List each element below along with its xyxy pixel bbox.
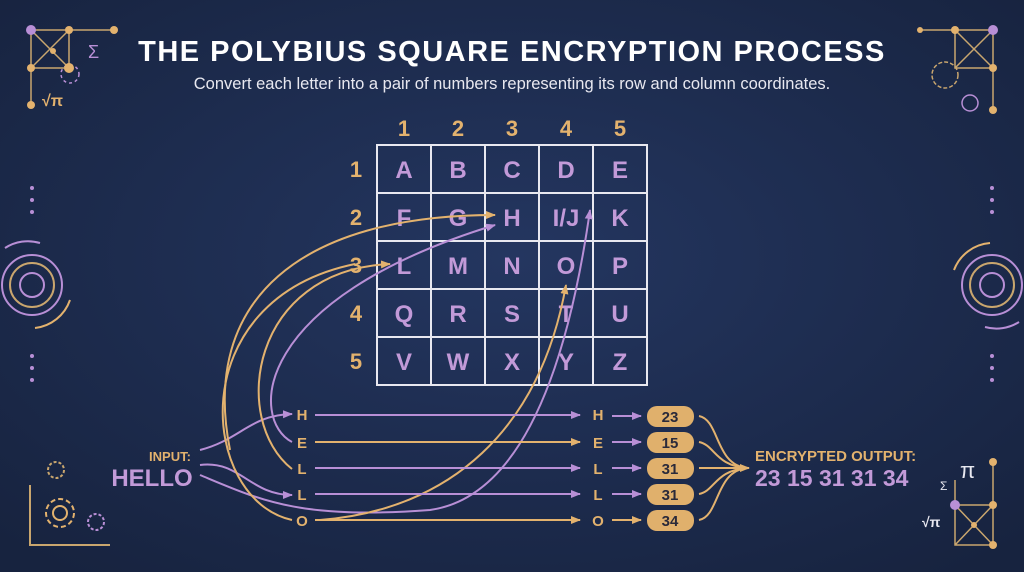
polybius grid: T: [559, 301, 574, 328]
polybius grid: B: [449, 157, 467, 184]
letter rows: L: [593, 487, 603, 504]
polybius grid: [350, 116, 647, 385]
polybius grid: G: [449, 205, 467, 232]
polybius grid: 5: [614, 116, 626, 141]
decorative corner: top-left: [31, 30, 114, 105]
polybius grid: Y: [558, 349, 574, 376]
letter rows: O: [296, 513, 308, 530]
letter rows: H: [297, 407, 307, 424]
polybius grid: W: [447, 349, 470, 376]
polybius grid: 1: [350, 157, 362, 182]
polybius grid: Q: [395, 301, 413, 328]
letter rows: E: [297, 435, 307, 452]
polybius grid: 5: [350, 349, 362, 374]
polybius grid: S: [504, 301, 520, 328]
decorative wheel left: [2, 241, 70, 328]
result pills: 34: [662, 513, 679, 530]
result pills: 23: [662, 409, 678, 426]
result pills: 15: [662, 435, 678, 452]
letter rows: L: [297, 461, 307, 478]
polybius grid: 1: [398, 116, 410, 141]
decorative wheel right: [954, 243, 1022, 329]
letter rows: [296, 407, 641, 530]
decorative corner bottom-left gears: [30, 462, 110, 545]
polybius grid: L: [397, 253, 411, 280]
polybius grid: K: [611, 205, 629, 232]
text: π: [960, 458, 975, 483]
title: THE POLYBIUS SQUARE ENCRYPTION PROCESS: [138, 36, 886, 68]
result pills: 31: [662, 487, 678, 504]
polybius grid: A: [395, 157, 413, 184]
polybius grid: E: [612, 157, 628, 184]
polybius grid: U: [611, 301, 629, 328]
input label: HELLO: [111, 465, 193, 492]
result pills: [647, 406, 694, 531]
input label: [111, 449, 193, 492]
polybius grid: 3: [506, 116, 518, 141]
polybius grid: 4: [560, 116, 573, 141]
polybius grid: X: [504, 349, 520, 376]
bracket arrow: [699, 416, 749, 520]
polybius grid: Z: [613, 349, 627, 376]
polybius grid: 2: [452, 116, 464, 141]
text: √π: [42, 93, 63, 110]
encrypted output: ENCRYPTED OUTPUT:: [755, 448, 916, 465]
polybius grid: F: [397, 205, 411, 232]
polybius grid: P: [612, 253, 628, 280]
polybius grid: V: [396, 349, 412, 376]
text: Σ: [940, 479, 947, 493]
text: Σ: [88, 42, 99, 62]
text: √π: [922, 514, 941, 530]
letter rows: L: [297, 487, 307, 504]
polybius grid: N: [503, 253, 521, 280]
result pills: 31: [662, 461, 678, 478]
decorative corner bottom-right: [955, 462, 993, 545]
polybius grid: M: [448, 253, 468, 280]
polybius grid: 4: [350, 301, 363, 326]
arrows: lookup curves: [200, 210, 590, 520]
letter rows: H: [593, 407, 603, 424]
polybius grid: 2: [350, 205, 362, 230]
encrypted output: 23 15 31 31 34: [755, 465, 909, 491]
letter rows: O: [592, 513, 604, 530]
polybius grid: C: [503, 157, 521, 184]
letter rows: L: [593, 461, 603, 478]
letter rows: E: [593, 435, 603, 452]
polybius grid: I/J: [553, 205, 579, 232]
polybius grid: D: [557, 157, 575, 184]
input label: INPUT:: [149, 449, 191, 464]
subtitle: Convert each letter into a pair of numbers representing its row and column coordinates.: [194, 75, 830, 93]
polybius grid: O: [557, 253, 575, 280]
polybius grid: H: [503, 205, 521, 232]
polybius grid: R: [449, 301, 467, 328]
polybius grid: 3: [350, 253, 362, 278]
encrypted output: [755, 448, 916, 491]
decorative corner: top-right: [920, 30, 993, 111]
